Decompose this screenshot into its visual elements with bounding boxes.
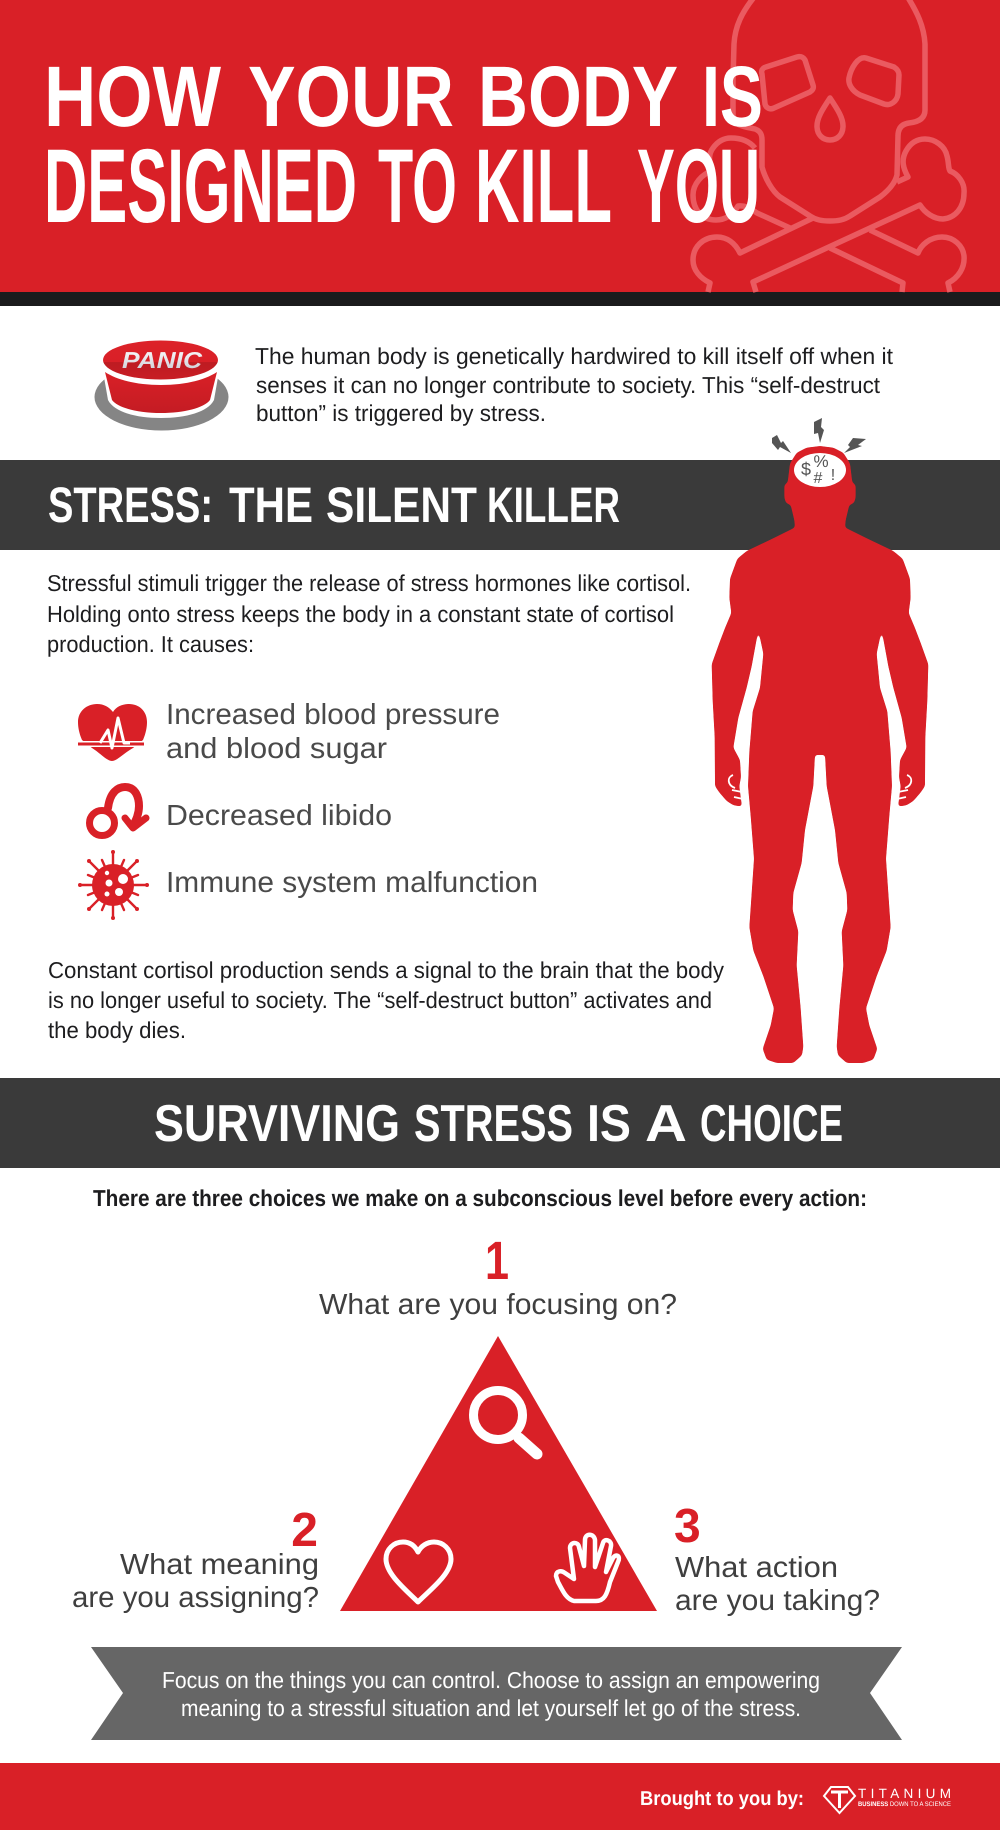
intro text	[255, 343, 894, 426]
callout text	[162, 1667, 820, 1721]
item: blood pressure	[76, 699, 500, 765]
choice triangle	[340, 1336, 657, 1611]
icon: panic button	[94, 340, 228, 430]
logo: titanium: BUSINESS DOWN TO A SCIENCE	[858, 1801, 952, 1808]
cortisol text	[48, 957, 724, 1043]
stress text: Holding onto stress keeps the body in a constant state of cortisol	[47, 601, 674, 627]
title: KILL	[475, 128, 612, 245]
title: TO	[378, 128, 457, 245]
title: HOW	[44, 49, 222, 145]
heading: IS	[587, 1095, 631, 1153]
intro text: senses it can no longer contribute to society. This “self-destruct	[256, 372, 881, 398]
icon: virus	[78, 850, 149, 920]
brain opening with symbols: !	[831, 467, 835, 484]
choice 1: 1	[485, 1231, 509, 1291]
heading: SURVIVING	[154, 1095, 400, 1153]
title: BODY	[478, 49, 678, 145]
footer	[0, 1763, 1000, 1830]
choice 3	[674, 1500, 880, 1617]
icon: skull and crossbones outline	[693, 0, 964, 292]
heading: KILLER	[487, 477, 620, 533]
heading: A	[645, 1095, 687, 1153]
heading: STRESS	[414, 1095, 573, 1153]
cortisol text: Constant cortisol production sends a signal to the brain that the body	[48, 957, 724, 983]
choice 1: What are you focusing on?	[319, 1289, 677, 1321]
logo: titanium: TITANIUM	[858, 1786, 951, 1801]
panic label: PANIC	[122, 347, 202, 373]
choice 3: What action	[675, 1552, 838, 1584]
icon: hand	[556, 1535, 619, 1601]
stress text	[47, 570, 691, 657]
icon: heart	[386, 1542, 451, 1602]
icon: falling male symbol	[90, 787, 146, 836]
cortisol text: is no longer useful to society. The “self-destruct button” activates and	[48, 987, 712, 1013]
section bar: surviving stress	[0, 1078, 1000, 1168]
heading: STRESS:	[48, 477, 213, 533]
heading: THE	[229, 477, 313, 533]
title	[44, 49, 763, 245]
choices intro: There are three choices we make on a subconscious level before every action:	[93, 1185, 867, 1211]
logo: titanium	[824, 1786, 952, 1813]
choice 2: 2	[291, 1504, 318, 1557]
icon: heart with pulse	[76, 704, 149, 761]
brain opening with symbols	[794, 452, 846, 487]
stress text: production. It causes:	[47, 631, 254, 657]
title: YOUR	[248, 49, 454, 145]
title: DESIGNED	[44, 128, 357, 245]
icon: magnifier	[474, 1390, 537, 1454]
brain opening with symbols: $	[801, 459, 811, 479]
heading	[48, 477, 620, 533]
label: Increased blood pressure	[166, 699, 500, 731]
intro text: The human body is genetically hardwired to kill itself off when it	[255, 343, 894, 369]
body silhouette	[712, 418, 928, 1063]
brain opening with symbols: #	[814, 470, 823, 487]
label: Immune system malfunction	[166, 867, 538, 899]
choice 3: are you taking?	[675, 1585, 880, 1617]
choice 1	[319, 1231, 677, 1321]
choice 2: are you assigning?	[72, 1582, 319, 1614]
callout ribbon	[91, 1647, 902, 1740]
item: immune system	[78, 850, 538, 920]
callout text: meaning to a stressful situation and let yourself let go of the stress.	[181, 1695, 801, 1721]
item: libido	[90, 787, 392, 836]
label: Decreased libido	[166, 800, 392, 832]
section bar: stress the silent killer	[0, 460, 1000, 550]
brain opening with symbols: %	[813, 452, 829, 471]
heading	[154, 1095, 843, 1153]
label	[166, 699, 500, 765]
choice 2	[72, 1504, 319, 1614]
stress text: Stressful stimuli trigger the release of stress hormones like cortisol.	[47, 570, 691, 596]
intro text: button” is triggered by stress.	[256, 400, 546, 426]
label: and blood sugar	[166, 733, 387, 765]
title: YOU	[637, 128, 760, 245]
heading: CHOICE	[700, 1095, 843, 1153]
icon: lightning bolts	[772, 418, 866, 453]
callout text: Focus on the things you can control. Choose to assign an empowering	[162, 1667, 820, 1693]
choice 2: What meaning	[120, 1549, 319, 1581]
header banner	[0, 0, 1000, 306]
heading: SILENT	[326, 477, 477, 533]
title: IS	[702, 49, 763, 145]
cortisol text: the body dies.	[48, 1017, 186, 1043]
brought to you by: Brought to you by:	[640, 1788, 804, 1810]
choice 3: 3	[674, 1500, 701, 1553]
